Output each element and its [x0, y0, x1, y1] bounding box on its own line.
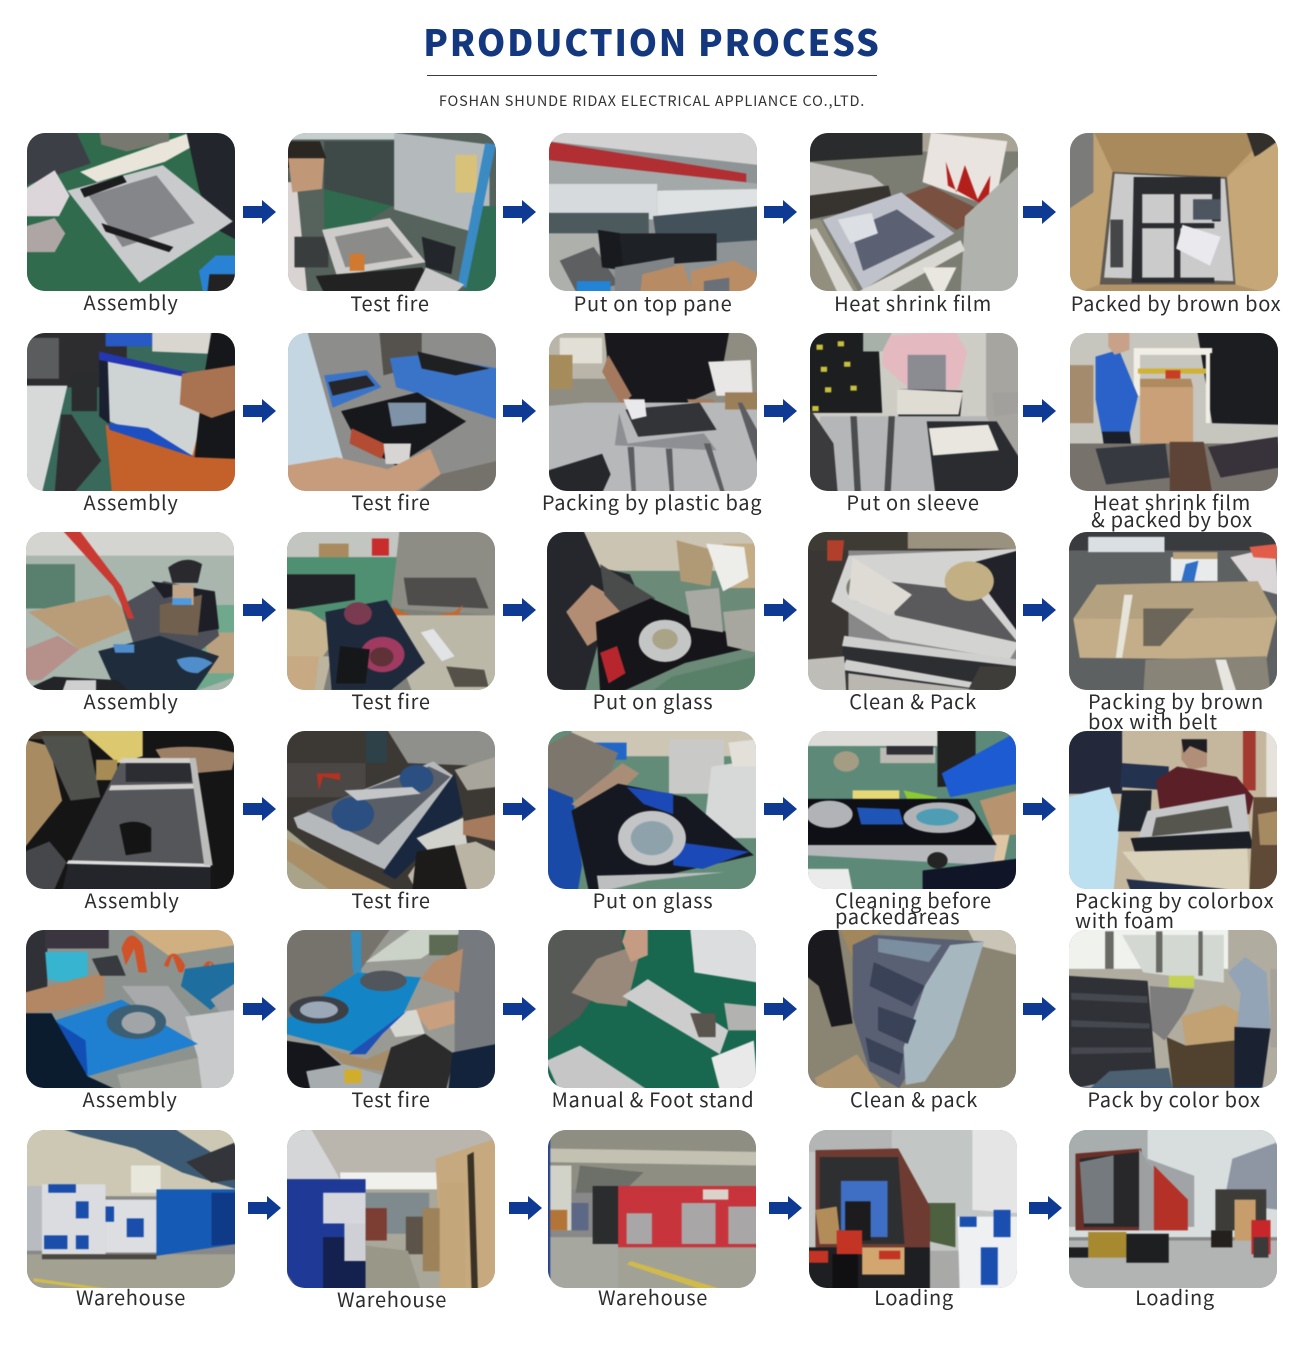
- arrow: [503, 200, 536, 224]
- label: two lines: [1091, 487, 1253, 533]
- label: Loading: [874, 1282, 954, 1311]
- title: PRODUCTION PROCESS: [423, 15, 881, 67]
- label: two lines: box with belt: [1088, 706, 1218, 735]
- label: two lines: packedareas: [835, 901, 960, 930]
- arrow: [248, 1196, 281, 1220]
- label: Assembly: [85, 885, 179, 914]
- label: two lines: [1088, 686, 1264, 735]
- label: Warehouse: [76, 1282, 186, 1311]
- arrow: [1023, 399, 1056, 423]
- photo: manual and foot stand on green table: [548, 930, 756, 1088]
- subtitle: company name: FOSHAN SHUNDE RIDAX ELECTRICAL APPLIANCE CO.,LTD.: [439, 90, 865, 111]
- photo: hob packed in brown box: [1070, 133, 1278, 291]
- label: Test fire: [351, 885, 431, 914]
- label: Put on top pane: [574, 288, 732, 317]
- photo: test fire with red hobs: [287, 532, 495, 690]
- label: Packing by plastic bag: [542, 487, 762, 516]
- photo: loading truck with forklift: [809, 1130, 1017, 1288]
- photo: assembly of blue stove: [26, 930, 234, 1088]
- label: two lines: Packing by brown: [1088, 686, 1264, 715]
- photo: warehouse blue-white stacks: [27, 1130, 235, 1288]
- photo: cleaning glass stove with blue sleeve: [808, 731, 1016, 889]
- arrow: [243, 200, 276, 224]
- photo: worker assembling in row 3: [26, 532, 234, 690]
- label: Test fire: [351, 1084, 431, 1113]
- label: Packed by brown box: [1071, 288, 1281, 317]
- photo: packing by plastic bag on silver table: [549, 333, 757, 491]
- label: two lines: Cleaning before: [835, 885, 992, 914]
- photo: assembly tray on green table: [27, 133, 235, 291]
- arrow: [1023, 200, 1056, 224]
- arrow: [243, 797, 276, 821]
- arrow: [243, 997, 276, 1021]
- label: Warehouse: [598, 1282, 708, 1311]
- label: two lines: Heat shrink film: [1093, 487, 1251, 516]
- arrow: [503, 997, 536, 1021]
- photo: test fire blue stove: [287, 930, 495, 1088]
- arrow: [1023, 997, 1056, 1021]
- photo: packing by colorbox with foam: [1069, 731, 1277, 889]
- label: two lines: & packed by box: [1091, 504, 1253, 533]
- photo: brown box with belt: [1069, 532, 1277, 690]
- label: Loading: [1135, 1282, 1215, 1311]
- arrow: [503, 399, 536, 423]
- photo: test fire small burner with blue bins: [288, 333, 496, 491]
- arrow: [243, 598, 276, 622]
- label: Clean & Pack: [849, 686, 977, 715]
- photo: heat shrink film machine: [810, 133, 1018, 291]
- label: Assembly: [83, 1084, 177, 1113]
- label: Assembly: [84, 287, 178, 316]
- label: Assembly: [84, 487, 178, 516]
- label: two lines: [1075, 885, 1274, 934]
- photo: clean and pack wrapped glass tops: [808, 532, 1016, 690]
- photo: put on glass blue reflective: [548, 731, 756, 889]
- label: two lines: with foam: [1075, 905, 1175, 934]
- arrow: [503, 797, 536, 821]
- label: Test fire: [351, 487, 431, 516]
- arrow: [1023, 797, 1056, 821]
- arrow: [764, 598, 797, 622]
- label: two lines: [835, 885, 992, 930]
- label: Manual & Foot stand: [552, 1084, 754, 1113]
- photo: test fire long stainless stove: [287, 731, 495, 889]
- photo: test fire on stainless panel: [288, 133, 496, 291]
- arrow: [243, 399, 276, 423]
- photo: put on sleeve, stove boxes: [810, 333, 1018, 491]
- arrow: [764, 797, 797, 821]
- arrow: [764, 200, 797, 224]
- photo: pack by color box by window: [1069, 930, 1277, 1088]
- arrow: [1023, 598, 1056, 622]
- photo: heat shrink film and packed by box: [1070, 333, 1278, 491]
- label: Test fire: [351, 686, 431, 715]
- arrow: [769, 1196, 802, 1220]
- label: Put on glass: [593, 885, 713, 914]
- photo: put on glass, rings: [547, 532, 755, 690]
- label: two lines: Packing by colorbox: [1075, 885, 1274, 914]
- photo: clean and pack wrapped pallet: [808, 930, 1016, 1088]
- arrow: [503, 598, 536, 622]
- photo: warehouse aisle with cartons: [287, 1130, 495, 1288]
- label: Pack by color box: [1087, 1084, 1261, 1113]
- label: Put on sleeve: [846, 487, 980, 516]
- arrow: [764, 997, 797, 1021]
- photo: assembly of long frame on black surface: [26, 731, 234, 889]
- label: Clean & pack: [850, 1084, 978, 1113]
- label: Assembly: [84, 686, 178, 715]
- photo: assembly of blue-framed panel: [27, 333, 235, 491]
- label: Put on glass: [593, 686, 713, 715]
- photo: loading red truck: [1069, 1130, 1277, 1288]
- label: Heat shrink film: [834, 288, 992, 317]
- label: Warehouse: [337, 1284, 447, 1313]
- arrow: [509, 1196, 542, 1220]
- arrow: [1029, 1196, 1062, 1220]
- arrow: [764, 399, 797, 423]
- photo: warehouse red stacks: [548, 1130, 756, 1288]
- photo: workshop line, top pane: [549, 133, 757, 291]
- label: Test fire: [350, 288, 430, 317]
